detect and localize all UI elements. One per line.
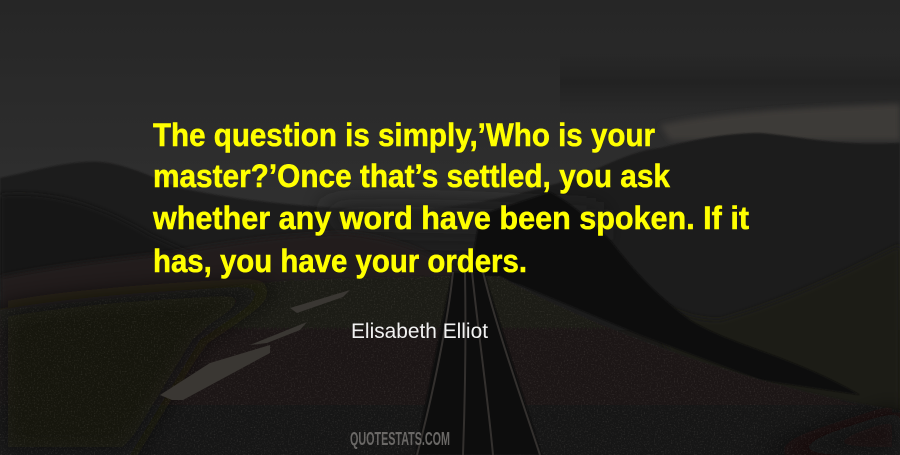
quote line 4: has, you have your orders. — [153, 243, 527, 279]
watermark: QUOTESTATS.COM — [350, 429, 450, 449]
background: sky — [0, 0, 900, 300]
gravel texture — [0, 276, 900, 455]
quote line 3: whether any word have been spoken. If it — [152, 200, 749, 236]
background: gravel ground — [0, 276, 900, 455]
quote text — [152, 117, 749, 279]
quote line 2: master?’Once that’s settled, you ask — [153, 158, 670, 194]
author name: Elisabeth Elliot — [351, 320, 488, 343]
background: valley slopes — [0, 192, 900, 420]
railway track — [415, 272, 542, 455]
quote line 1: The question is simply,’Who is your — [153, 117, 655, 153]
road markings — [160, 290, 350, 400]
background: far mountains — [0, 133, 900, 330]
